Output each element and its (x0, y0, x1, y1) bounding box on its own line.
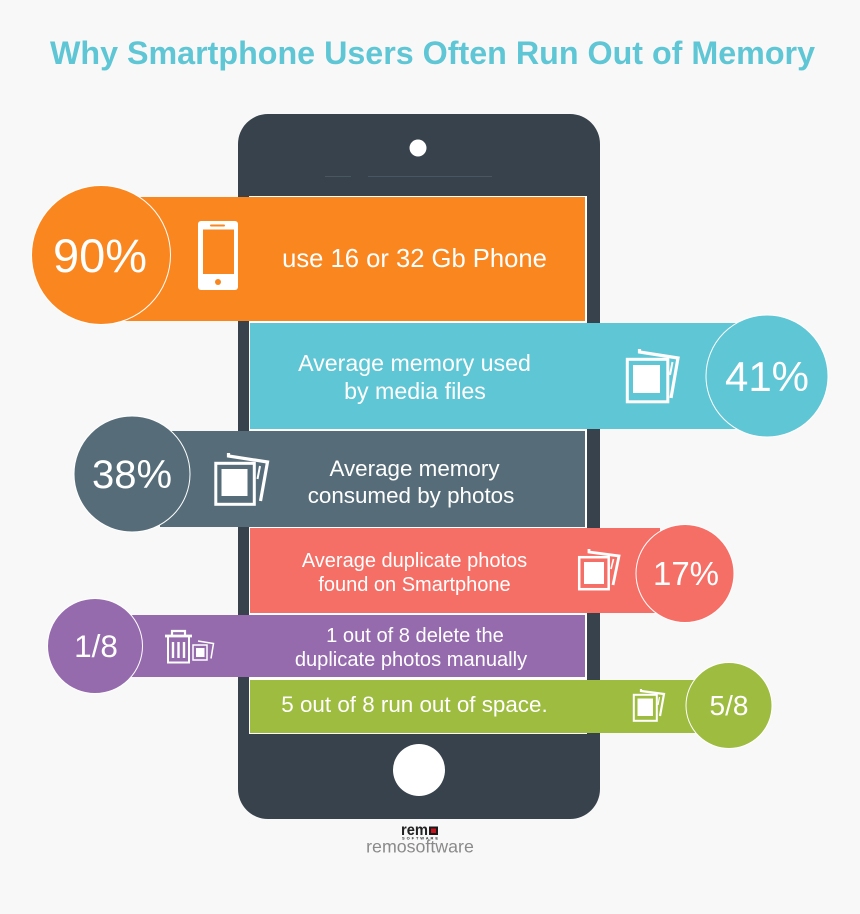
stat circle: 5/8 (686, 662, 772, 748)
panel: 1/8 (48, 598, 585, 694)
text: average memory consumed by photos: consumed by photos (308, 483, 514, 508)
stat: 5/8: 5/8 (710, 690, 748, 721)
logo mark: SOFTWARE (402, 836, 438, 840)
icon: photos (579, 549, 619, 589)
stat: 17%: 17% (653, 555, 719, 592)
phone screen (249, 196, 587, 734)
text: average memory used by media files: by media files (344, 378, 486, 404)
logo wordmark: remosoftware (366, 836, 474, 856)
phone camera (410, 140, 426, 156)
phone home button (393, 744, 445, 796)
icon: photos (216, 453, 268, 504)
stat circle: 17% (636, 524, 734, 622)
logo mark: rem (401, 822, 428, 839)
panel: 17% (250, 524, 734, 622)
panel: 5/8 (250, 662, 772, 748)
logo: remo software (366, 822, 474, 856)
title: Why Smartphone Users Often Run Out of Memory (50, 35, 815, 71)
stat circle: 90% (32, 186, 170, 324)
text: average memory consumed by photos: Average memory (329, 456, 500, 481)
stat circle: 1/8 (48, 598, 142, 694)
panel: 90% (32, 186, 585, 324)
panel: 41% (250, 315, 828, 437)
icon: smartphone (198, 221, 238, 290)
text: 5 out of 8 run out of space: 5 out of 8 run out of space. (281, 692, 548, 717)
panel: 38% (74, 416, 585, 532)
phone body (238, 114, 600, 819)
stat: 1/8: 1/8 (74, 628, 118, 664)
stat: 38%: 38% (92, 453, 172, 497)
icon: trash and photos (165, 631, 214, 662)
icon: photos (634, 689, 664, 721)
icon: photos (627, 349, 678, 402)
text: average duplicate photos found on smartphone: found on Smartphone (318, 574, 511, 596)
text: average memory used by media files: Average memory used (298, 350, 531, 376)
text: 1 out of 8 delete the duplicate photos manually: duplicate photos manually (295, 649, 527, 671)
text: use 16 or 32 Gb Phone: use 16 or 32 Gb Phone (282, 245, 547, 273)
text: 1 out of 8 delete the duplicate photos manually: 1 out of 8 delete the (326, 625, 504, 647)
stat: 90%: 90% (53, 229, 147, 282)
stat: 41%: 41% (725, 353, 809, 400)
text: average duplicate photos found on smartphone: Average duplicate photos (302, 550, 527, 572)
stat circle: 38% (74, 416, 190, 532)
stat circle: 41% (706, 315, 828, 437)
phone speaker (325, 176, 492, 178)
